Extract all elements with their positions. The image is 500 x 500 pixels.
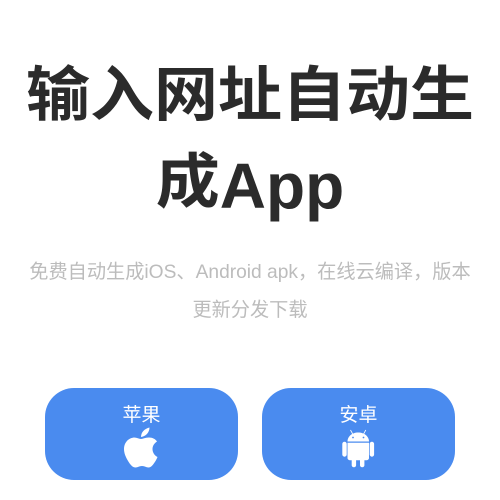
subtitle text [29,262,471,321]
icon: apple logo [124,428,158,468]
title: App [220,150,344,222]
icon: android robot [342,430,374,468]
title: 成 [156,149,220,215]
button: Android: 安卓 [339,405,378,426]
title: 输入网址自动生 [26,62,474,128]
button: Apple: 苹果 [122,405,160,426]
subtitle text: 免费自动生成iOS、Android apk，在线云编译，版本 [29,262,471,283]
subtitle text: 更新分发下载 [192,300,308,321]
button: Apple [45,388,238,480]
title [26,62,474,222]
button: Android [262,388,455,480]
